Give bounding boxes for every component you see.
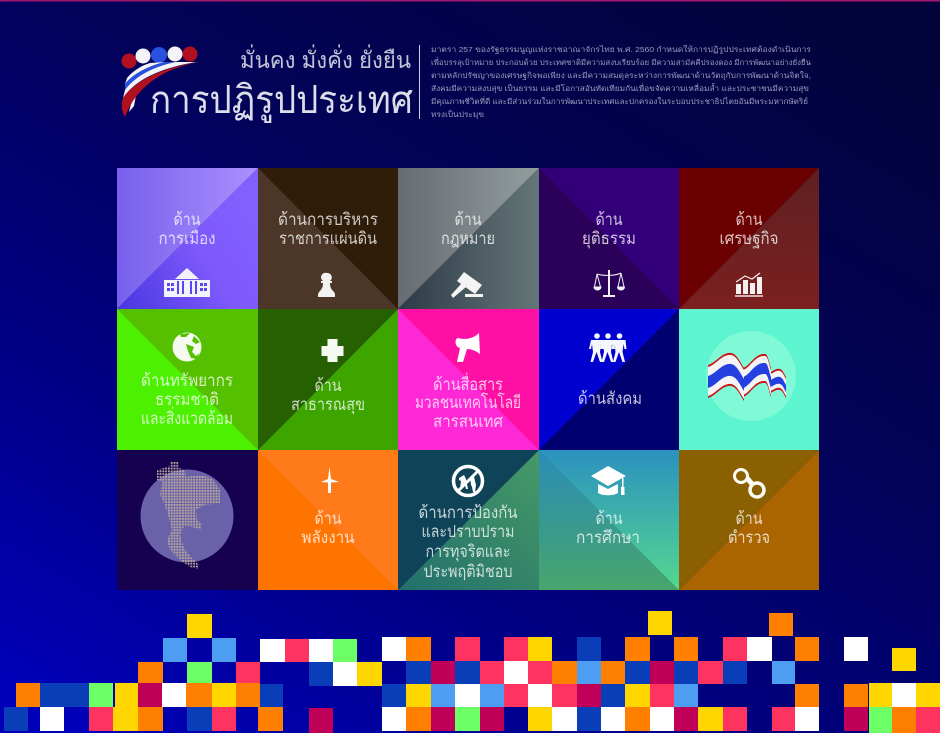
- panel: media and technology: ด้านสื่อสาร: [433, 372, 503, 394]
- logo: people and flag swoosh: [122, 46, 205, 117]
- icon: waving flag: [708, 353, 786, 401]
- panel: anti-corruption: [398, 450, 539, 590]
- panel: politics: ด้าน: [174, 210, 201, 229]
- panel: justice: ด้าน: [596, 210, 623, 229]
- panel: media and technology: มวลชนเทคโนโลยี: [415, 392, 521, 412]
- panel: media and technology: สารสนเทศ: [433, 412, 503, 431]
- constitution paragraph: เพื่อบรรลุเป้าหมาย ประกอบด้วย ประเทศชาติมีความสงบเรียบร้อย มีความสามัคคีปรองดอง มีการพัฒนาอย่างยั่งยืน: [431, 57, 811, 67]
- icon: growth chart: [735, 273, 763, 297]
- panel: natural resources: ธรรมชาติ: [155, 390, 219, 409]
- panel: police: ตำรวจ: [728, 528, 770, 547]
- icon: wind turbine: [321, 467, 339, 493]
- panel: energy: ด้าน: [314, 509, 342, 528]
- panel: public administration: [258, 168, 398, 309]
- constitution paragraph: [431, 45, 811, 119]
- panel: politics: การเมือง: [158, 229, 216, 248]
- constitution paragraph: ทรงเป็นประมุข: [431, 109, 484, 119]
- panel: society: [539, 309, 679, 450]
- panel: natural resources: และสิ่งแวดล้อม: [141, 406, 233, 428]
- panel: anti-corruption: และปราบปราม: [422, 522, 514, 541]
- constitution paragraph: มีคุณภาพชีวิตที่ดี และมีส่วนร่วมในการพัฒนาประเทศและปกครองในระบอบประชาธิปไตยอันมีพระมหากษัตริย์: [431, 96, 808, 106]
- panel: justice: ยุติธรรม: [582, 229, 636, 249]
- panel: energy: พลังงาน: [302, 528, 355, 547]
- panel: economy: [679, 168, 819, 309]
- icon: prohibition sign: [454, 466, 482, 496]
- panel: anti-corruption: การทุจริตและ: [426, 542, 510, 562]
- panel: public administration: ราชการแผ่นดิน: [279, 229, 377, 248]
- panel: energy: [258, 450, 398, 590]
- panel: public health: สาธารณสุข: [291, 395, 365, 415]
- icon: handcuffs: [734, 470, 764, 497]
- panel: anti-corruption: ประพฤติมิชอบ: [424, 562, 512, 581]
- constitution paragraph: มาตรา 257 ของรัฐธรรมนูญแห่งราชอาณาจักรไทย พ.ศ. 2560 กำหนดให้การปฏิรูปประเทศต้องดำเนินการ: [431, 45, 811, 54]
- icon: chess pawn: [318, 273, 335, 297]
- icon: medical cross: [322, 339, 344, 362]
- title: การปฏิรูปประเทศ: [150, 79, 413, 123]
- panel: public health: ด้าน: [314, 376, 342, 395]
- panel: public health: [258, 309, 398, 450]
- panel: media and technology: [398, 309, 539, 450]
- panel: thailand map: [117, 450, 258, 590]
- panel: natural resources: [117, 309, 258, 450]
- icon: government building: [164, 268, 210, 297]
- panel: thai flag: [679, 309, 819, 450]
- icon: megaphone: [456, 333, 480, 362]
- icon: dotted thailand map: [157, 461, 220, 569]
- panel: law: [398, 168, 539, 309]
- panel: society: ด้านสังคม: [578, 389, 642, 408]
- icon: scales: [594, 270, 624, 296]
- panel: anti-corruption: ด้านการป้องกัน: [418, 503, 518, 522]
- panel: economy: เศรษฐกิจ: [720, 229, 778, 249]
- panel: justice: [539, 168, 679, 309]
- panel: law: ด้าน: [454, 210, 482, 229]
- panel: economy: ด้าน: [736, 210, 763, 229]
- panel: natural resources: ด้านทรัพยากร: [141, 371, 233, 390]
- constitution paragraph: สังคมมีความสงบสุข เป็นธรรม และมีโอกาสอันทัดเทียมกันเพื่อขจัดความเหลื่อมล้ำ และประชาชนมีความสุข: [431, 83, 809, 93]
- icon: three people: [589, 333, 626, 362]
- constitution paragraph: ตามหลักปรัชญาของเศรษฐกิจพอเพียง และมีความสมดุลระหว่างการพัฒนาด้านวัตถุกับการพัฒนาด้านจิตใจ,: [431, 71, 811, 80]
- panel: education: ด้าน: [596, 509, 623, 528]
- decorative pixel squares: [4, 611, 940, 733]
- panel: police: [679, 450, 819, 590]
- slogan: มั่นคง มั่งคั่ง ยั่งยืน: [240, 44, 411, 73]
- panel: education: การศึกษา: [576, 528, 640, 547]
- panel: education: [539, 450, 679, 590]
- icon: globe: [172, 332, 202, 362]
- icon: graduation cap: [591, 466, 626, 495]
- panel: public administration: ด้านการบริหาร: [278, 210, 378, 229]
- icon: gavel: [451, 272, 483, 298]
- panel: law: กฎหมาย: [441, 229, 495, 248]
- panel: police: ด้าน: [736, 509, 763, 528]
- panel: politics: [117, 168, 258, 309]
